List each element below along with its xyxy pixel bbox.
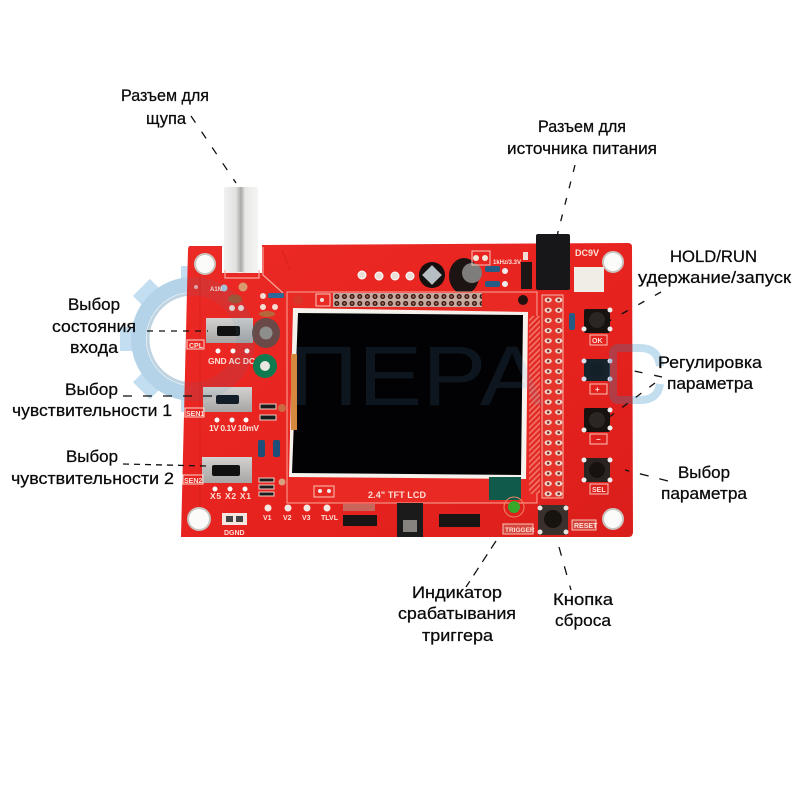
icon: white connector — [574, 267, 604, 292]
test points V1 V2 V3 TLVL: V3 — [302, 515, 311, 522]
switch labels and positions: GND AC DC — [208, 356, 255, 366]
label: trigger indicator: срабатывания — [398, 605, 516, 623]
label: trigger indicator: триггера — [422, 627, 494, 645]
watermark: gear on white — [120, 266, 266, 412]
label: sensitivity 2 — [11, 448, 174, 488]
DGND header — [222, 513, 247, 537]
icon: button minus: − — [596, 435, 601, 444]
icon: button OK — [582, 308, 612, 345]
display sub-board — [287, 292, 563, 503]
text: DC9V: DC9V — [575, 248, 599, 258]
small parts near switches — [258, 404, 334, 497]
text: TFT LCD: 2.4" TFT LCD — [368, 490, 426, 500]
leader lines — [123, 116, 668, 590]
icon: trimmers — [252, 318, 280, 378]
text: reset label: RESET — [574, 523, 598, 530]
label: sensitivity 2: Выбор — [66, 448, 118, 466]
label: sensitivity 2: чувствительности 2 — [11, 470, 174, 488]
label: hold run: удержание/запуск — [638, 269, 792, 287]
panel: red circuit board — [181, 234, 633, 537]
label: power connector: Разъем для — [538, 118, 626, 136]
icon: probe BNC cylinder — [224, 187, 258, 281]
DGND header: DGND — [224, 530, 245, 537]
top board components — [194, 251, 532, 317]
label: power connector: источника питания — [507, 140, 657, 158]
label: hold run — [638, 248, 792, 287]
switch labels and positions: CPL — [189, 343, 204, 350]
test points V1 V2 V3 TLVL: TLVL — [321, 515, 339, 522]
icon: DC power jack — [536, 234, 570, 290]
label: hold run: HOLD/RUN — [670, 248, 757, 266]
text: trigger label — [503, 524, 535, 534]
right resistor — [569, 313, 575, 330]
connector right — [439, 514, 480, 527]
icon: button select — [582, 458, 612, 494]
label: trigger indicator: Индикатор — [412, 584, 502, 602]
switch labels and positions — [183, 340, 259, 501]
switch labels and positions: X5 X2 X1 — [210, 491, 251, 501]
label: trigger indicator — [398, 584, 516, 645]
label: probe connector: щупа — [146, 110, 187, 128]
label: parameter select: параметра — [661, 485, 748, 503]
icon: button OK: OK — [592, 338, 602, 345]
label: parameter adjust: Регулировка — [658, 354, 763, 372]
label: sensitivity 1 — [12, 381, 172, 420]
switch: input state — [206, 318, 253, 343]
connector left — [343, 504, 377, 526]
label: parameter select — [661, 464, 748, 503]
label: input state selector: Выбор — [68, 296, 120, 314]
label: reset button — [553, 591, 614, 630]
switch: sensitivity 1 — [203, 387, 252, 412]
label: input state selector: входа — [70, 339, 119, 357]
label: parameter select: Выбор — [678, 464, 730, 482]
label: input state selector — [52, 296, 136, 357]
label: sensitivity 1: чувствительности 1 — [12, 402, 172, 420]
label: parameter adjust: параметра — [667, 375, 754, 393]
label: probe connector: Разъем для — [121, 87, 209, 105]
test points V1 V2 V3 TLVL: V1 — [263, 515, 272, 522]
icon: reset button — [538, 505, 568, 535]
label: probe connector — [121, 87, 209, 128]
test points V1 V2 V3 TLVL: V2 — [283, 515, 292, 522]
text: trigger label: TRIGGER — [505, 527, 535, 534]
label: parameter adjust — [658, 354, 763, 393]
switch labels and positions: SEN2 — [184, 478, 202, 485]
icon: button minus — [582, 408, 612, 444]
display: white frame and black screen — [289, 308, 528, 479]
top board components: 1kHz/3.3V — [493, 260, 521, 266]
label: reset button: Кнопка — [553, 591, 614, 609]
icon: button plus: + — [595, 385, 600, 394]
icon: button plus — [582, 358, 612, 394]
watermark: faint gear over board and wordmark: ПЕРА — [289, 329, 544, 423]
icon: mounting holes — [188, 252, 623, 530]
label: power connector — [507, 118, 657, 158]
label: reset button: сброса — [555, 612, 612, 630]
icon: green trigger LED — [504, 497, 524, 517]
icon: button select: SEL — [592, 487, 606, 494]
switch: sensitivity 2 — [202, 457, 252, 483]
icon: mini USB — [397, 503, 423, 537]
test points V1 V2 V3 TLVL — [263, 504, 339, 522]
label: sensitivity 1: Выбор — [65, 381, 118, 399]
switch labels and positions: 1V 0.1V 10mV — [209, 423, 259, 433]
label: input state selector: состояния — [52, 318, 136, 336]
green flex tab — [489, 477, 521, 500]
switch labels and positions: SEN1 — [186, 411, 204, 418]
top board components: A1N — [210, 287, 222, 293]
text: reset label — [572, 520, 598, 530]
watermark: faint gear over board and wordmark — [138, 284, 660, 423]
